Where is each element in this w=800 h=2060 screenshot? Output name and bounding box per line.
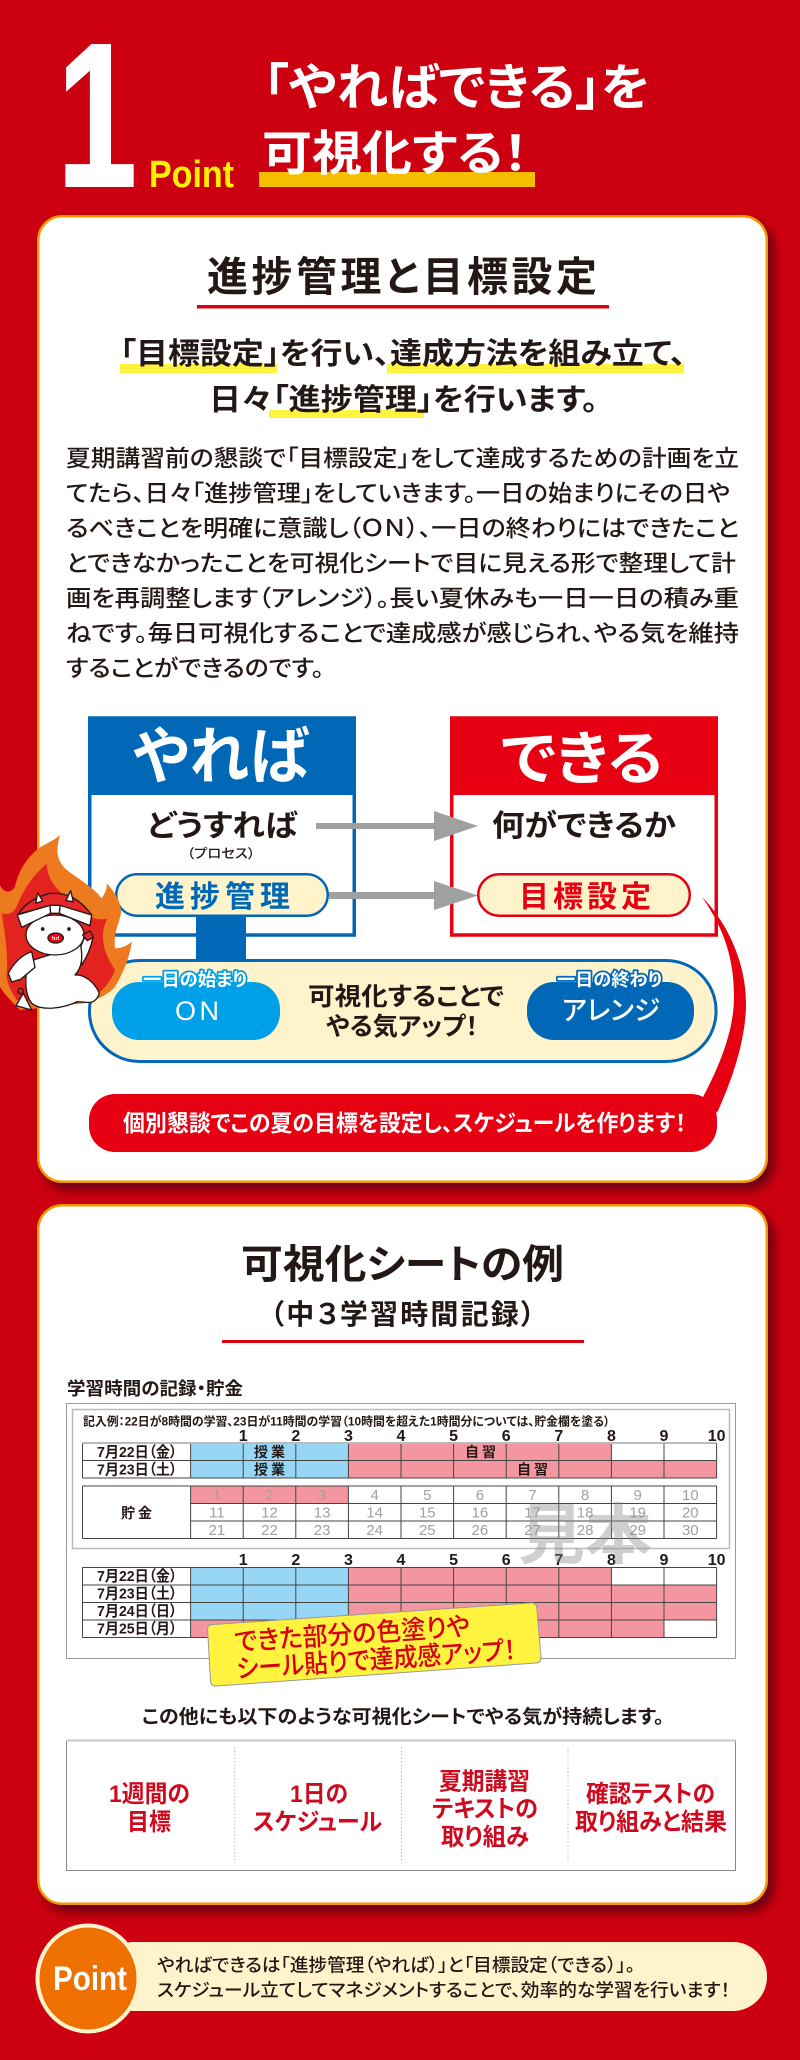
numeral 1: 1 [57,1,137,230]
item: summer textbook work: テキストの [432,1796,538,1823]
item: weekly goal [109,1781,190,1836]
savings table: 30 [682,1522,699,1539]
headline: 可視化する！ [262,128,528,181]
record hour scale: 3 [344,1552,353,1569]
lead text: 日々「進捗管理」を行います。 [209,384,598,417]
bottom point summary [38,1926,767,2032]
record hour scale: 9 [660,1552,669,1569]
caption: other sheets: この他にも以下のような可視化シートでやる気が持続します。 [142,1705,664,1728]
savings table: 22 [261,1522,278,1539]
record hour scale: 1 [239,1552,248,1569]
callout speech bubble: 個別懇談でこの夏の目標を設定し、スケジュールを作ります！ [123,1110,686,1136]
item: confirmation test: 取り組みと結果 [575,1809,727,1836]
example hour scale: 4 [397,1428,406,1445]
item: summer textbook work [432,1768,538,1851]
savings table: 10 [682,1487,699,1504]
body text: ねです。毎日可視化することで達成感が感じられ、やる気を維持 [66,620,739,646]
item: confirmation test: 確認テストの [586,1781,715,1808]
body text: とできなかったことを可視化シートで目に見える形で整理して計 [66,550,736,576]
panel heading: 可視化シートの例 [241,1243,564,1287]
box: dekiru [450,717,718,935]
lead text [120,338,686,418]
summary text [156,1956,730,2000]
savings table: 9 [634,1487,642,1504]
savings table: 8 [581,1487,589,1504]
arrow: progress to goal [329,881,478,910]
summary bar [100,1942,767,2011]
on pill: 一日の始まり [143,970,247,990]
savings table: 15 [419,1504,436,1522]
body text: 画を再調整します（アレンジ）。長い夏休みも一日一日の積み重 [66,585,739,611]
item: summer textbook work: 夏期講習 [439,1768,530,1796]
savings table [82,1486,717,1539]
box: yareba: どうすれば [147,810,298,843]
example table: 授業 [254,1444,285,1460]
example hour scale [239,1428,726,1445]
point badge: Point [53,1960,127,1998]
record hour scale: 6 [502,1552,511,1569]
summary text: スケジュール立てしてマネジメントすることで、効率的な学習を行います！ [157,1980,730,2000]
arrange pill: 一日の終わり [557,970,662,990]
sticky note callout: できた部分の色塗りや [233,1611,471,1657]
panel: visualization sheet example [38,1205,767,1904]
body text [66,445,739,681]
example hour scale: 7 [554,1428,563,1445]
icon: mascot in flames: hrl [52,936,60,942]
pill: goal setting: 目標設定 [519,881,651,914]
summary text: やればできるは「進捗管理（やれば）」と「目標設定（できる）」。 [156,1956,635,1976]
savings table: 23 [314,1522,330,1539]
savings table: 27 [524,1522,541,1539]
on pill: ON [175,996,219,1026]
example hour scale: 8 [607,1428,616,1445]
box: yareba: やれば [133,723,309,792]
pill: progress management [116,874,328,916]
box: dekiru: できる [501,727,663,792]
savings table: 16 [472,1504,488,1522]
sticky note callout [208,1603,541,1686]
arrange pill [527,970,694,1040]
item: summer textbook work: 取り組み [441,1824,529,1851]
pill: progress management: 進捗管理 [155,881,290,914]
heading rule [197,305,609,308]
record hour scale [239,1552,726,1569]
pill: goal setting [478,874,690,916]
savings table: 貯金 [121,1505,152,1521]
savings table: 12 [261,1504,278,1522]
savings table: 4 [371,1487,379,1504]
arrow: process to outcome [316,811,478,841]
connector [196,915,246,961]
example hour scale: 3 [344,1428,353,1445]
example hour scale: 5 [449,1428,458,1445]
arrange pill: アレンジ [562,996,660,1026]
body text: することができるのです。 [66,655,324,681]
band center text: 可視化することで [308,983,504,1011]
on pill [112,970,280,1040]
point label: Point [149,154,234,196]
savings table: 6 [476,1487,484,1504]
record hour scale: 8 [607,1552,616,1569]
watermark: 見本 [518,1498,652,1572]
item: weekly goal: 目標 [127,1809,171,1836]
headline: 「やればできる」を [263,60,650,116]
savings table: 21 [209,1522,225,1539]
example hour scale: 9 [660,1428,669,1445]
headline [262,60,650,181]
item: confirmation test [575,1781,727,1836]
savings table: 18 [577,1504,593,1522]
item: daily schedule: スケジュール [253,1809,382,1836]
headline underline bar [259,172,535,187]
callout speech bubble [89,897,746,1152]
example hour scale: 10 [708,1428,726,1445]
record hour scale: 4 [397,1552,406,1569]
savings table: 3 [318,1487,326,1504]
band center text [308,983,504,1041]
header: point 1 [57,1,650,230]
savings table: 20 [682,1504,699,1522]
box: yareba [88,717,356,935]
savings table: 19 [629,1504,646,1522]
example table: 自習 [465,1444,496,1460]
savings table: 11 [209,1504,225,1522]
item: daily schedule: 1日の [290,1781,348,1808]
savings table: 14 [366,1504,383,1522]
example hour scale: 2 [291,1428,300,1445]
panel heading: 進捗管理と目標設定 [207,254,597,300]
example table [82,1442,717,1478]
record table: 7月24日（日） [97,1603,177,1620]
body text: るべきことを明確に意識し（ＯＮ）、一日の終わりにはできたこと [66,515,739,541]
example hour scale: 6 [502,1428,511,1445]
record table: 7月22日（金） [97,1567,177,1585]
savings table: 17 [524,1504,541,1522]
record table [82,1567,717,1638]
savings table: 25 [419,1522,436,1539]
example table: 自習 [517,1462,548,1478]
lead text: 「目標設定」を行い、達成方法を組み立て、 [120,338,686,371]
icon: mascot in flames [0,835,132,1010]
example table: 授業 [254,1462,285,1478]
study record sheet: 記入例：22日が8時間の学習、23日が11時間の学習（10時間を超えた1時間分については、貯金欄を塗る） [83,1414,610,1428]
body text: てたら、日々「進捗管理」をしていきます。一日の始まりにその日や [66,480,730,506]
record hour scale: 10 [708,1552,726,1569]
item: daily schedule [253,1781,382,1836]
savings table: 26 [472,1522,488,1539]
study record sheet [66,1404,736,1686]
savings table: 2 [265,1487,274,1504]
savings table: 5 [423,1487,431,1504]
box: dekiru: 何ができるか [492,809,676,843]
box: yareba: （プロセス） [187,846,255,861]
record hour scale: 2 [291,1552,300,1569]
savings table: 24 [366,1522,383,1539]
band center text: やる気アップ！ [325,1013,478,1041]
visualization band [90,960,716,1062]
savings table: 1 [213,1487,221,1504]
sticky note callout: シール貼りで達成感アップ！ [235,1635,517,1684]
savings table: 28 [577,1522,593,1539]
savings table: 29 [629,1522,646,1539]
record hour scale: 7 [554,1552,563,1569]
panel: progress management and goal setting [0,216,767,1182]
panel background [38,1205,767,1904]
other sheets box [66,1740,736,1870]
example hour scale: 1 [239,1428,248,1445]
point badge [38,1926,138,2032]
body text: 夏期講習前の懇談で「目標設定」をして達成するための計画を立 [66,445,739,471]
savings table: 13 [314,1504,330,1522]
example table: 7月23日（土） [97,1462,177,1478]
item: weekly goal: 1週間の [109,1781,190,1808]
record table: 7月25日（月） [97,1620,177,1638]
panel subheading: （中３学習時間記録） [270,1299,535,1330]
heading rule [222,1340,584,1343]
record table: 7月23日（土） [97,1586,177,1602]
sheet title: 学習時間の記録・貯金 [67,1378,243,1399]
example table: 7月22日（金） [97,1443,177,1461]
panel background [38,216,767,1182]
savings table: 7 [528,1487,537,1504]
record hour scale: 5 [449,1552,458,1569]
